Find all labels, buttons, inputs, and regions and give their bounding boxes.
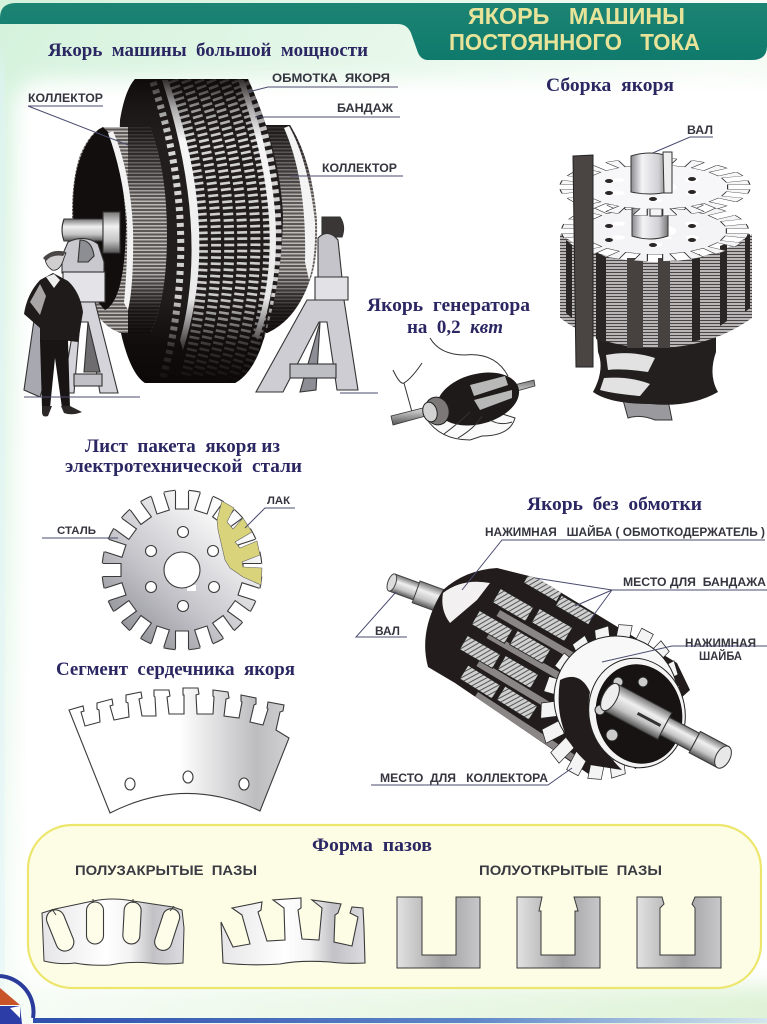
tooth ring bbox=[514, 600, 706, 804]
core stack bbox=[560, 234, 752, 348]
lacquer coating bbox=[217, 501, 262, 585]
label: место для коллектора bbox=[371, 768, 572, 785]
winding dash columns bbox=[153, 80, 278, 378]
ground lines bbox=[24, 393, 378, 397]
disc holes bbox=[605, 177, 696, 247]
label: коллектор left bbox=[28, 93, 128, 145]
right collector bbox=[250, 125, 317, 333]
man figure bbox=[24, 251, 83, 416]
core bars bbox=[460, 576, 594, 761]
panel: slot shapes bbox=[28, 825, 761, 988]
header band bbox=[0, 3, 767, 60]
right shaft bbox=[597, 680, 736, 774]
gear sheet with lacquer bbox=[102, 490, 262, 650]
label: нажимная шайба right: ШАЙБА bbox=[699, 650, 742, 663]
hub bbox=[579, 649, 695, 777]
title bbox=[449, 3, 700, 55]
title: ПОСТОЯННОГО ТОКА bbox=[449, 29, 700, 55]
upper disc bbox=[560, 158, 750, 216]
U slot 2 bbox=[517, 897, 600, 968]
heading: no winding: Якорь без обмотки bbox=[527, 495, 702, 515]
heading: generator armature: Якорь генератора bbox=[367, 296, 530, 316]
logo mark bbox=[0, 976, 34, 1024]
central wheel bbox=[115, 79, 283, 383]
heading: sheet bbox=[65, 437, 302, 477]
label: нажимная шайба right bbox=[602, 638, 767, 663]
U slot 3 bbox=[637, 897, 721, 968]
title: ЯКОРЬ МАШИНЫ bbox=[468, 3, 685, 29]
label: half-open: ПОЛУОТКРЫТЫЕ ПАЗЫ bbox=[479, 863, 662, 878]
left collector bbox=[72, 127, 167, 333]
label: обмотка якоря bbox=[248, 73, 398, 92]
illustration: armature without winding bbox=[386, 568, 732, 780]
label: обмотка якоря: ОБМОТКА ЯКОРЯ bbox=[272, 73, 390, 85]
label: нажимная шайба right: НАЖИМНАЯ bbox=[685, 638, 756, 650]
bell hub bbox=[593, 337, 718, 405]
bottom shaft bbox=[623, 400, 672, 420]
label: нажимная шайба top bbox=[462, 526, 765, 590]
lower disc bbox=[561, 201, 749, 261]
U slot 1 bbox=[397, 897, 480, 968]
label: лак bbox=[245, 495, 295, 528]
heading: armature assembly: Сборка якоря bbox=[546, 75, 674, 96]
label: бандаж: БАНДАЖ bbox=[337, 103, 394, 115]
illustration: armature assembly bbox=[560, 152, 752, 420]
illustration: generator armature in hand bbox=[391, 338, 535, 440]
label: нажимная шайба top: НАЖИМНАЯ ШАЙБА ( ОБМОТКОДЕРЖАТЕЛЬ ) bbox=[485, 526, 765, 539]
lower shaft segment bbox=[632, 208, 668, 239]
label: сталь bbox=[42, 525, 118, 538]
right stand bbox=[256, 217, 358, 392]
heading: sheet: электротехнической стали bbox=[65, 457, 302, 477]
heading: sheet: Лист пакета якоря из bbox=[85, 437, 280, 457]
body silhouette bbox=[425, 568, 690, 777]
bottom rule bbox=[33, 1018, 767, 1023]
press washer bbox=[554, 636, 678, 760]
label: лак: ЛАК bbox=[267, 495, 290, 507]
shaft and bearing bbox=[62, 212, 120, 273]
label: сталь: СТАЛЬ bbox=[57, 525, 96, 537]
label: вал top: ВАЛ bbox=[687, 125, 713, 137]
heading: generator armature bbox=[367, 296, 530, 338]
label: место для коллектора: МЕСТО ДЛЯ КОЛЛЕКТОРА bbox=[380, 773, 548, 785]
left shaft bbox=[384, 571, 444, 612]
heading: slot form: Форма пазов bbox=[312, 836, 432, 856]
left stand bbox=[24, 272, 118, 397]
label: коллектор left: КОЛЛЕКТОР bbox=[28, 93, 103, 105]
heading: large machine armature: Якорь машины большой мощности bbox=[48, 40, 368, 61]
illustration: large machine armature bbox=[24, 79, 378, 416]
key bar bbox=[573, 155, 593, 367]
label: вал top bbox=[648, 125, 713, 155]
dome highlight bbox=[442, 582, 490, 623]
slot shape: oval slots bbox=[42, 899, 184, 965]
heading: generator armature: на 0,2 квт bbox=[407, 318, 503, 338]
upper shaft segment bbox=[631, 153, 668, 194]
label: место для бандажа: МЕСТО ДЛЯ БАНДАЖА bbox=[623, 577, 766, 589]
label: коллектор right bbox=[290, 163, 403, 176]
heading: segment: Сегмент сердечника якоря bbox=[56, 660, 295, 680]
label: half-closed: ПОЛУЗАКРЫТЫЕ ПАЗЫ bbox=[75, 863, 257, 878]
slot shape: rectangular slots bbox=[221, 898, 365, 965]
core segment bbox=[69, 688, 289, 813]
label: коллектор right: КОЛЛЕКТОР bbox=[322, 163, 397, 175]
label: вал: ВАЛ bbox=[375, 626, 400, 638]
label: место для бандажа bbox=[535, 577, 767, 620]
label: вал bbox=[356, 592, 407, 638]
